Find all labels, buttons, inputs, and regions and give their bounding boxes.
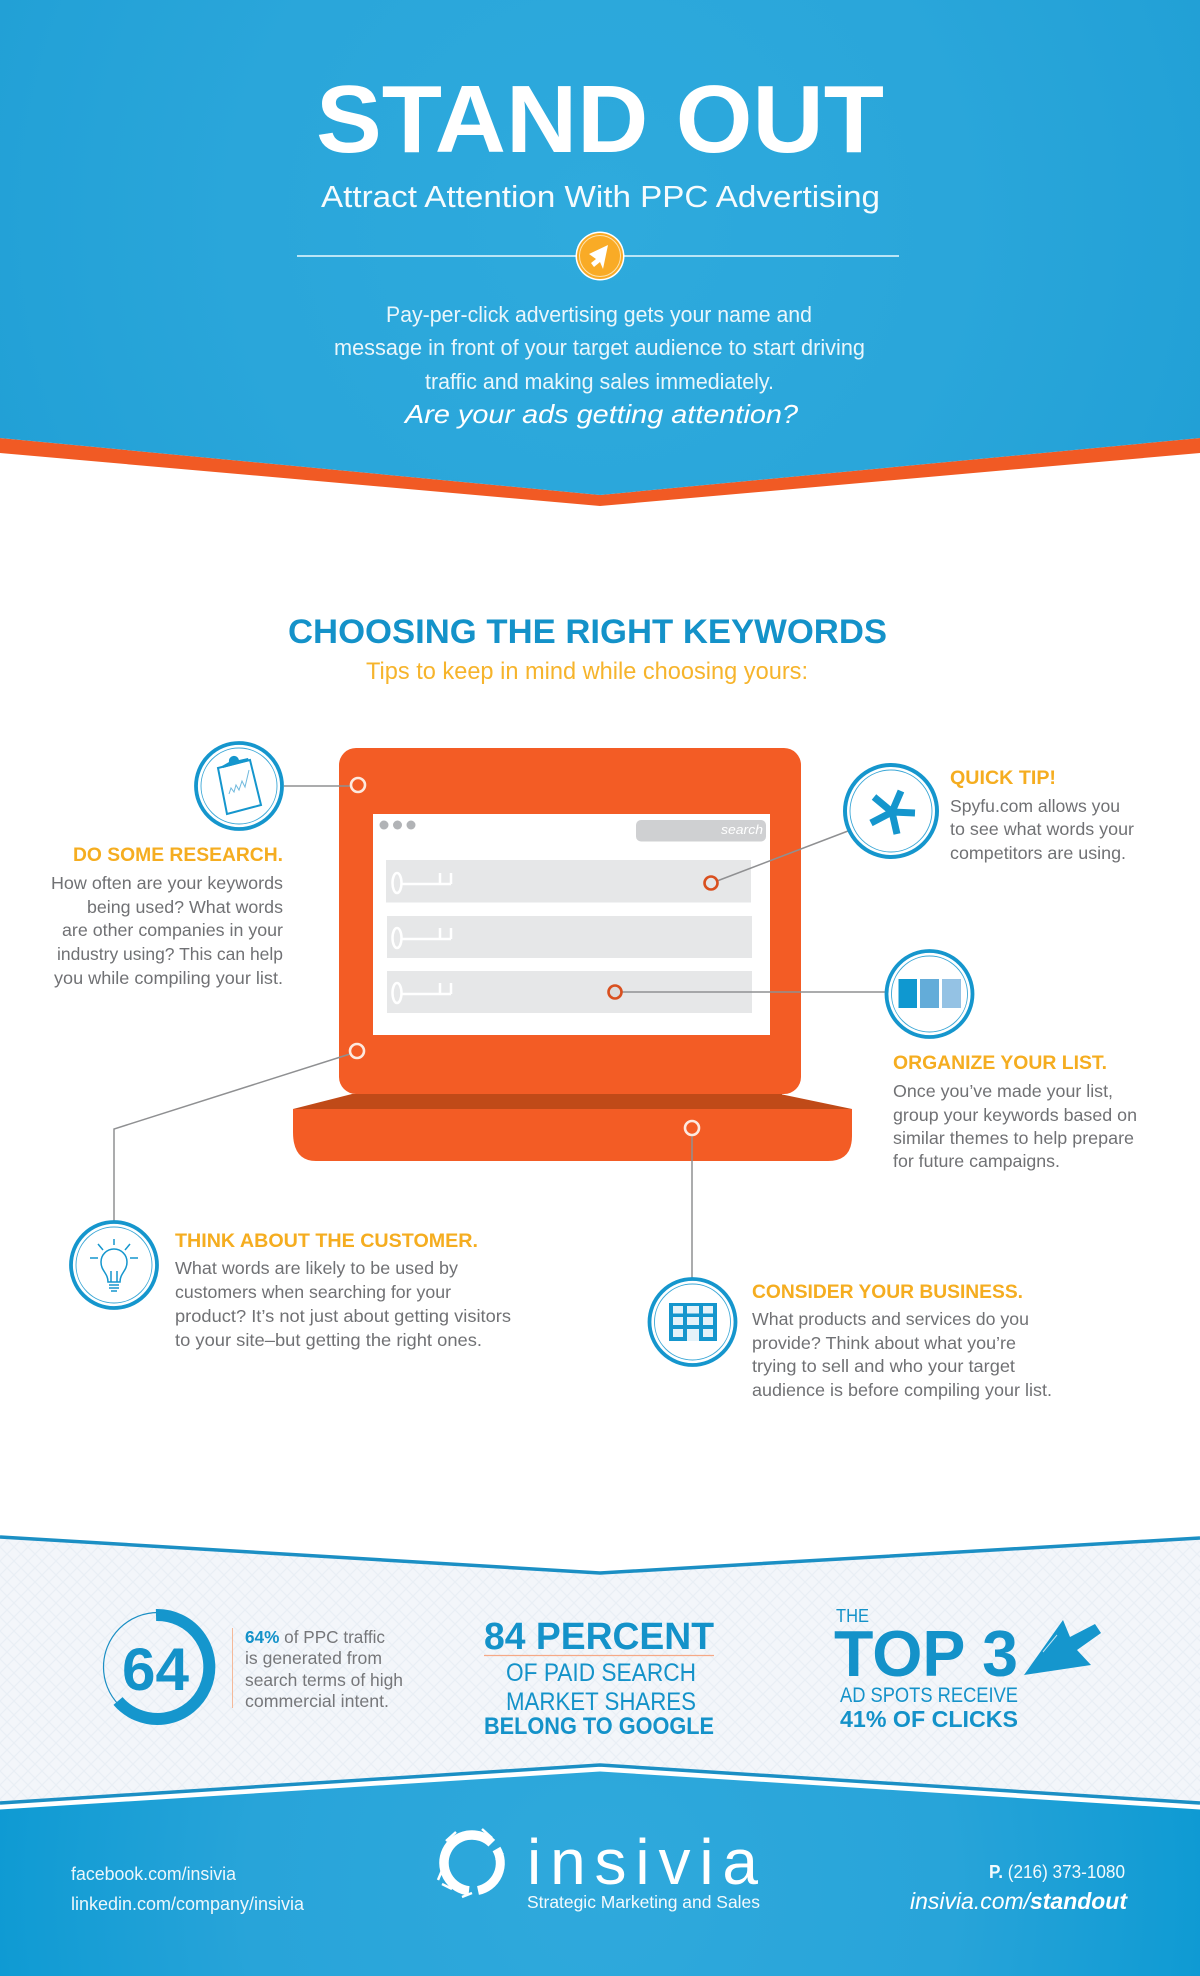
search bar	[636, 820, 766, 842]
stat: 84 percent: 84 PERCENT	[484, 1616, 714, 1658]
body text: are other companies in your	[62, 920, 283, 940]
keyword row 2	[387, 916, 752, 958]
body text: group your keywords based on	[893, 1105, 1137, 1125]
logo: Strategic Marketing and Sales	[527, 1892, 760, 1912]
orange chevron edge	[0, 438, 1200, 506]
section subheading: Tips to keep in mind while choosing yours:	[366, 658, 808, 685]
heading: DO SOME RESEARCH.	[73, 844, 283, 866]
social links	[71, 1864, 305, 1914]
laptop hinge shadow	[352, 1094, 782, 1109]
laptop illustration	[293, 748, 852, 1161]
social links: facebook.com/insivia	[71, 1864, 237, 1884]
panel: organize your list	[886, 951, 1137, 1171]
icon: building	[650, 1279, 736, 1365]
body text: What products and services do you	[752, 1309, 1029, 1329]
laptop lid	[339, 748, 801, 1094]
subtitle: Attract Attention With PPC Advertising	[321, 179, 880, 214]
body text: industry using? This can help	[57, 944, 283, 964]
icon: clipboard	[196, 743, 282, 829]
intro paragraph: message in front of your target audience to start driving	[334, 335, 865, 360]
heading: THINK ABOUT THE CUSTOMER.	[175, 1230, 478, 1252]
panel: do some research	[51, 743, 283, 988]
intro paragraph: traffic and making sales immediately.	[425, 369, 774, 394]
contact	[910, 1862, 1128, 1914]
intro paragraph: Pay-per-click advertising gets your name and	[386, 302, 812, 327]
band top edge	[0, 1537, 1200, 1573]
keyword row 1	[386, 860, 751, 902]
icon: asterisk	[845, 765, 937, 857]
panel: quick tip	[845, 765, 1134, 863]
stat: 84 percent: BELONG TO GOOGLE	[484, 1713, 714, 1740]
body text: provide? Think about what you’re	[752, 1333, 1016, 1353]
stat: top 3: AD SPOTS RECEIVE	[840, 1684, 1018, 1707]
keyword row 3	[387, 971, 752, 1013]
body text	[752, 1309, 1052, 1400]
divider with cursor icon	[297, 232, 899, 280]
icon: colour blocks	[886, 951, 972, 1037]
body text	[893, 1081, 1137, 1171]
icon: arrow	[1024, 1620, 1101, 1675]
body text: Spyfu.com allows you	[950, 796, 1120, 816]
stat: 84 percent	[484, 1616, 714, 1740]
band background	[0, 1537, 1200, 1803]
heading: QUICK TIP!	[950, 767, 1056, 789]
stat: top 3	[834, 1606, 1101, 1732]
laptop hinge	[293, 1094, 852, 1111]
body text: audience is before compiling your list.	[752, 1380, 1052, 1400]
contact: P. (216) 373-1080	[989, 1862, 1125, 1882]
donut chart: 64	[122, 1636, 190, 1703]
icon: light bulb	[71, 1222, 157, 1308]
connector lines	[114, 786, 886, 1278]
panel: think about the customer	[71, 1222, 511, 1350]
body text: to your site–but getting the right ones.	[175, 1330, 482, 1350]
stat: top 3: THE	[836, 1606, 869, 1626]
stat text: 64% of PPC traffic	[245, 1627, 385, 1647]
logo: insivia	[527, 1826, 758, 1898]
laptop hotspots	[350, 778, 718, 1135]
body text: Once you’ve made your list,	[893, 1081, 1113, 1101]
body text: product? It’s not just about getting visitors	[175, 1306, 511, 1326]
laptop base	[293, 1109, 852, 1161]
italic question: Are your ads getting attention?	[403, 399, 799, 429]
window dots	[380, 820, 416, 830]
title: STAND OUT	[316, 66, 884, 173]
panel: consider your business	[650, 1279, 1052, 1400]
footer background	[0, 1772, 1200, 1976]
body text: trying to sell and who your target	[752, 1356, 1015, 1376]
body text: being used? What words	[87, 897, 283, 917]
body text: to see what words your	[950, 819, 1134, 839]
stat text: commercial intent.	[245, 1691, 389, 1711]
body text	[950, 796, 1134, 863]
contact: insivia.com/standout	[910, 1888, 1128, 1914]
body text: for future campaigns.	[893, 1151, 1060, 1171]
body text	[51, 873, 283, 988]
social links: linkedin.com/company/insivia	[71, 1894, 305, 1914]
stats band	[0, 1537, 1200, 1803]
browser screen	[373, 814, 770, 1035]
header section	[0, 0, 1200, 506]
section heading: CHOOSING THE RIGHT KEYWORDS	[288, 613, 887, 651]
body text: competitors are using.	[950, 843, 1126, 863]
heading: CONSIDER YOUR BUSINESS.	[752, 1281, 1023, 1303]
icon: brush ring	[438, 1829, 503, 1897]
stat: 84 percent: MARKET SHARES	[506, 1688, 696, 1716]
body text: What words are likely to be used by	[175, 1258, 458, 1278]
footer	[0, 1765, 1200, 1976]
search bar: search	[721, 822, 763, 837]
body text	[175, 1258, 511, 1350]
stat: top 3: 41% OF CLICKS	[840, 1706, 1018, 1732]
stat text: search terms of high	[245, 1670, 403, 1690]
body text: customers when searching for your	[175, 1282, 451, 1302]
header background	[0, 0, 1200, 495]
body text: you while compiling your list.	[54, 968, 283, 988]
footer edge stripes	[0, 1765, 1200, 1807]
stat text: is generated from	[245, 1648, 382, 1668]
stat text	[245, 1627, 403, 1711]
icon: cursor arrow	[576, 232, 624, 280]
intro paragraph	[334, 302, 865, 394]
body text: How often are your keywords	[51, 873, 283, 893]
stat: top 3: TOP 3	[834, 1617, 1018, 1690]
heading: ORGANIZE YOUR LIST.	[893, 1052, 1107, 1074]
stat: 84 percent: OF PAID SEARCH	[506, 1659, 696, 1687]
body text: similar themes to help prepare	[893, 1128, 1134, 1148]
stat: 64 percent	[104, 1612, 403, 1722]
donut chart	[104, 1612, 212, 1722]
logo	[438, 1826, 760, 1912]
